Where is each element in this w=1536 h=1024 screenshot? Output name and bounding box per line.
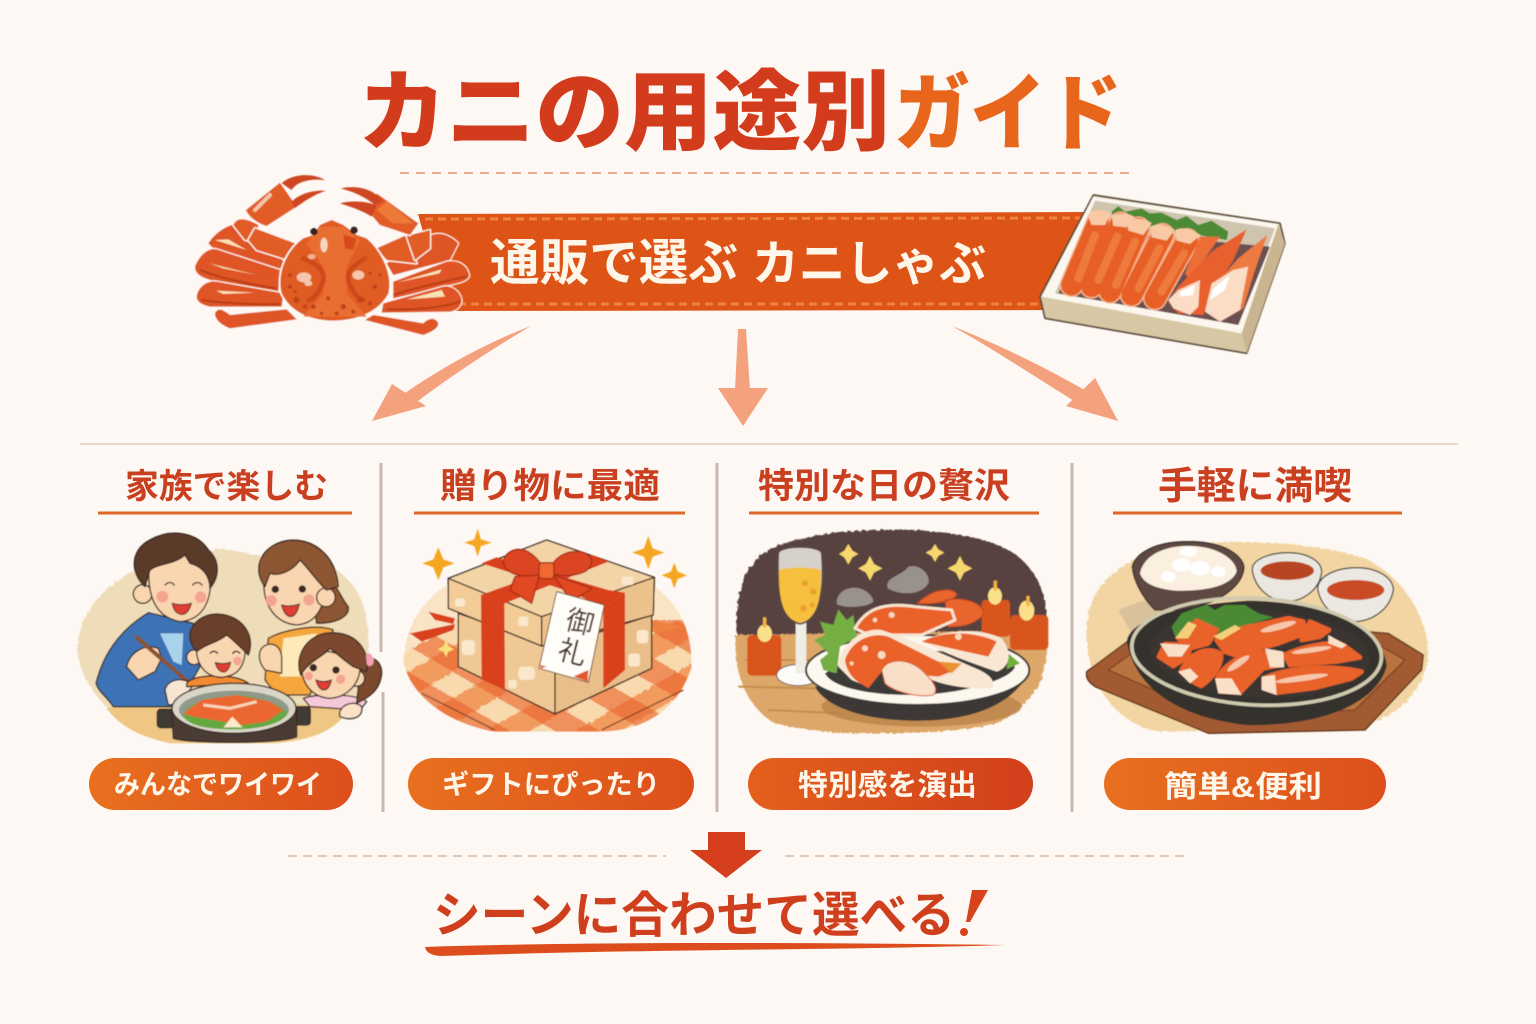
illustration: sizzling crab plate — [1086, 542, 1428, 733]
banner: カニしゃぶ — [752, 238, 986, 291]
heading: special day: 特別な日の贅沢 — [758, 467, 1010, 506]
arrow: down to conclusion — [690, 832, 762, 878]
stars — [839, 544, 972, 581]
panel: casual — [1086, 466, 1428, 810]
illustration: gift box — [395, 529, 705, 737]
bow — [503, 549, 592, 603]
tag — [539, 592, 604, 682]
candles — [747, 600, 1048, 676]
pill: family: みんなでワイワイ — [114, 770, 322, 800]
pot — [157, 683, 310, 742]
crab pieces — [1159, 618, 1362, 693]
title: カニの用途別 — [358, 63, 890, 162]
tag: 御 — [563, 604, 597, 641]
title — [358, 63, 1122, 162]
smoke — [837, 566, 929, 607]
boy — [187, 614, 251, 687]
banner: 通販で選ぶ — [490, 235, 738, 291]
pill: special day — [748, 758, 1033, 810]
swoosh underline — [425, 943, 1006, 956]
plate — [815, 677, 1027, 721]
tag: 礼 — [555, 634, 590, 671]
conclusion text: シーンに合わせて選べる — [433, 889, 955, 943]
pill: gift: ギフトにぴったり — [442, 770, 660, 800]
heading: casual: 手軽に満喫 — [1158, 466, 1352, 508]
panel: family — [77, 468, 382, 810]
icon: crab tray — [1040, 195, 1285, 353]
pill: family — [89, 758, 353, 810]
title: ガイド — [894, 67, 1122, 161]
skillet — [1127, 601, 1387, 725]
girl — [299, 633, 382, 719]
sauces — [1252, 553, 1393, 622]
arrow: right — [952, 326, 1118, 421]
infographic: crab usage guide — [76, 68, 1458, 956]
glass — [777, 547, 823, 686]
pill: gift — [408, 758, 694, 810]
illustration: luxury dinner — [735, 530, 1048, 734]
arrow: left — [372, 326, 531, 421]
pill: casual: 簡単&便利 — [1164, 771, 1322, 804]
pill: special day: 特別感を演出 — [798, 769, 977, 802]
illustration: family around hot pot — [77, 533, 382, 743]
banner — [418, 212, 1088, 311]
panel: gift — [395, 467, 705, 810]
crab legs — [918, 590, 983, 627]
icon: crab — [195, 175, 469, 335]
sparkles — [422, 529, 687, 657]
dad — [96, 533, 217, 707]
pill: casual — [1104, 758, 1386, 810]
panel: special day — [735, 467, 1048, 810]
mom — [259, 540, 348, 695]
board — [1086, 617, 1423, 733]
arrow: center — [718, 329, 768, 426]
bowl — [1132, 542, 1244, 610]
heading: gift: 贈り物に最適 — [440, 467, 660, 506]
heading: family: 家族で楽しむ — [125, 468, 328, 506]
